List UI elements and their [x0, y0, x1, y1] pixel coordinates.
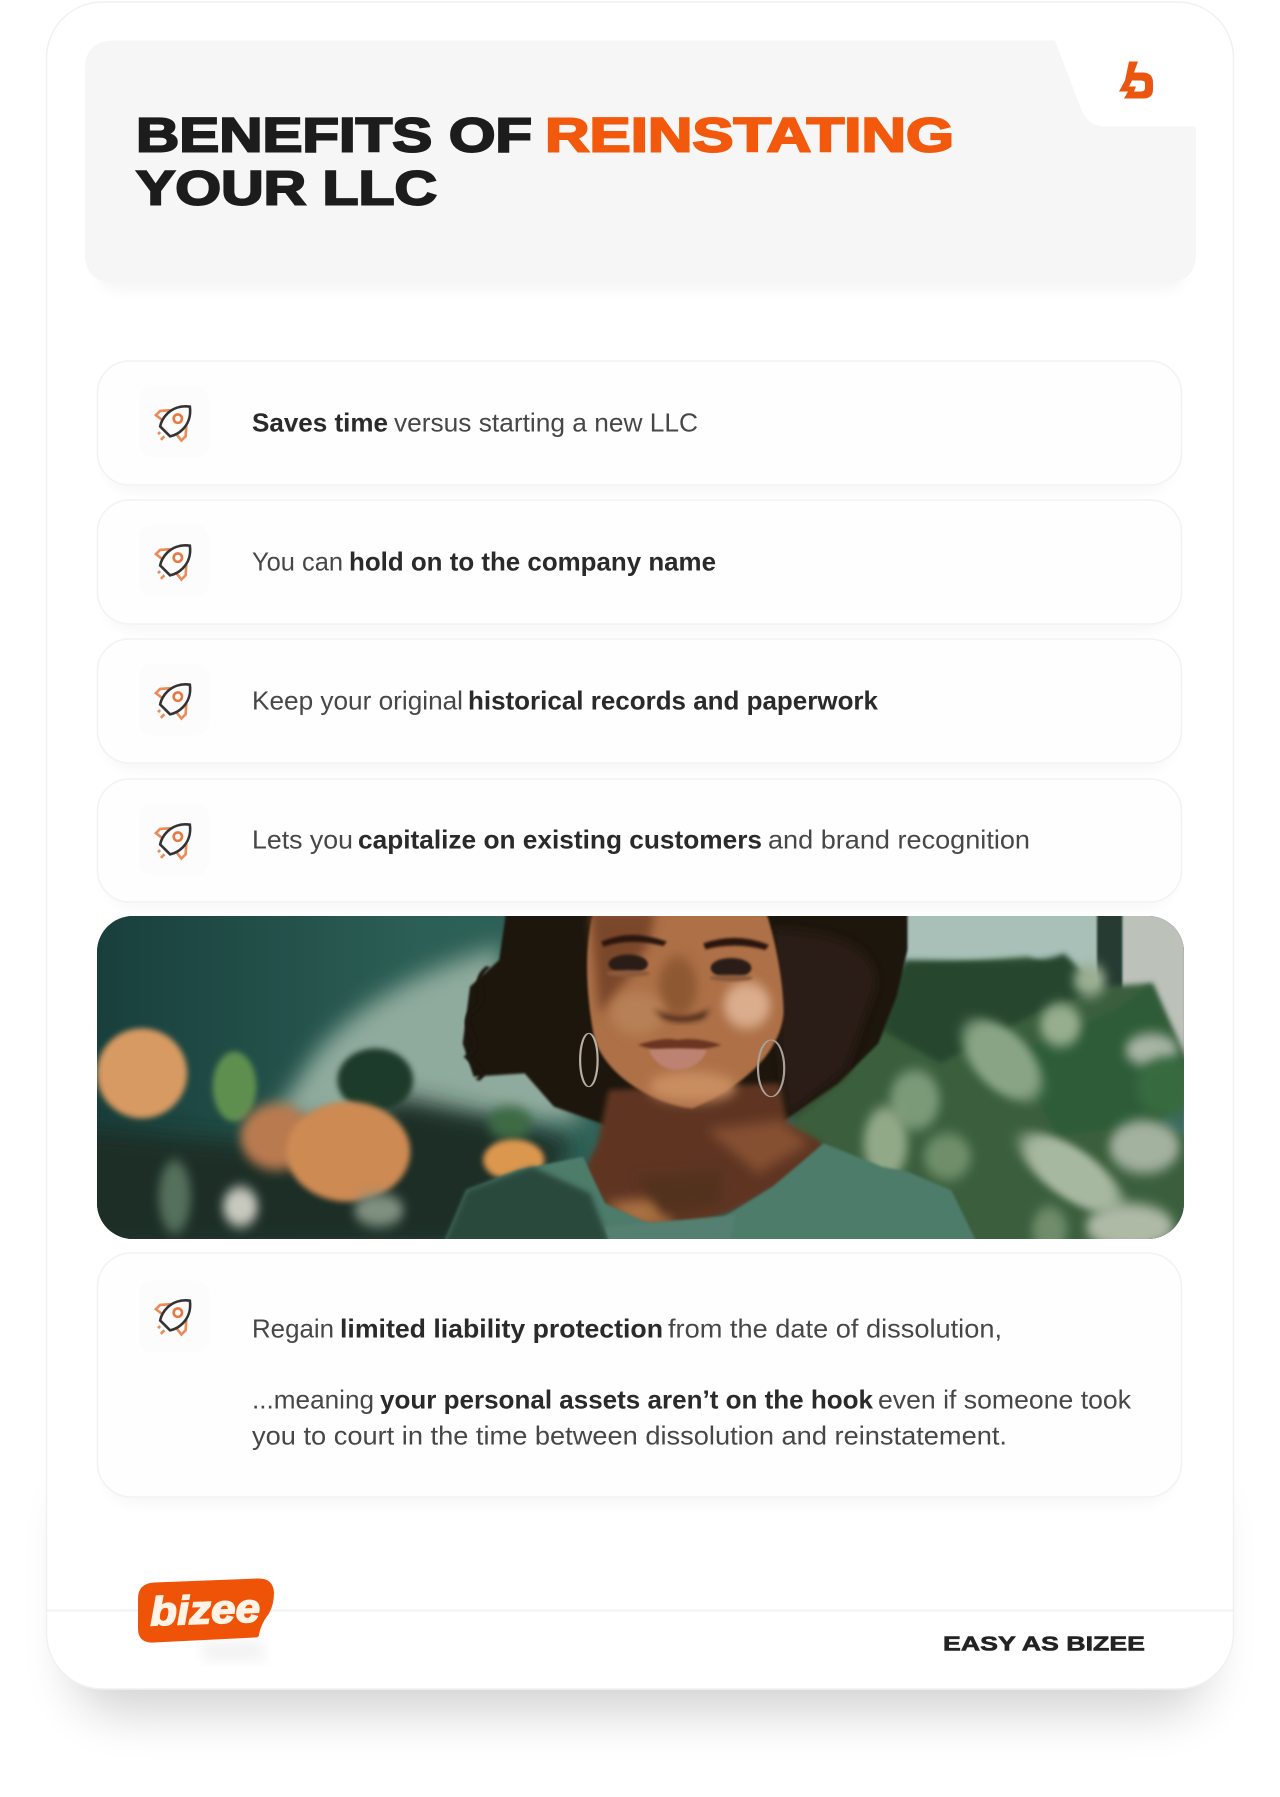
curls	[466, 966, 488, 1080]
lips	[638, 1039, 722, 1050]
header soft shadow	[99, 260, 1184, 290]
tagline: EASY AS BIZEE	[943, 1634, 1145, 1656]
eyes and brows	[601, 934, 667, 946]
card drop shadow	[71, 1478, 1209, 1714]
benefit 4 text: capitalize on existing customers	[358, 824, 762, 854]
left foreground dark foliage	[80, 1096, 576, 1250]
panel: benefit 2	[98, 500, 1182, 632]
wall highlight	[270, 946, 583, 1123]
benefit 5 text: Regain	[252, 1314, 334, 1344]
panel: benefit 3	[98, 639, 1182, 770]
benefit 5 text: your personal assets aren’t on the hook	[380, 1384, 874, 1414]
benefit 5 text: you to court in the time between dissolution and reinstatement.	[252, 1420, 1007, 1450]
shirt	[441, 1143, 980, 1250]
title: YOUR LLC	[136, 162, 437, 216]
logo: bizee	[138, 1578, 274, 1660]
panel: benefit 1	[98, 361, 1182, 492]
benefit 5 text: even if someone took	[878, 1384, 1132, 1414]
cheek and chin light	[724, 981, 770, 1028]
benefit 4 text	[252, 824, 1030, 854]
benefit 4 text: and brand recognition	[768, 824, 1030, 854]
plant leaves	[773, 956, 1210, 1250]
benefit 5 text: limited liability protection	[340, 1314, 663, 1344]
benefit 5 text	[252, 1314, 1132, 1450]
benefit 1 text: Saves time	[252, 408, 388, 438]
benefit 5 text: ...meaning	[252, 1384, 374, 1414]
icon: rocket	[139, 1280, 209, 1352]
benefit 5 text: from the date of dissolution,	[668, 1314, 1002, 1344]
right edge fade	[1192, 910, 1210, 1250]
icon: rocket	[139, 386, 209, 458]
icon: bizee mark	[1119, 62, 1153, 98]
panel: benefit 4	[98, 779, 1182, 908]
flowers	[97, 1028, 187, 1118]
earrings	[580, 1033, 598, 1086]
panel: benefit 5	[98, 1253, 1182, 1504]
title	[136, 110, 954, 216]
right background	[897, 910, 1108, 990]
title: REINSTATING	[545, 110, 954, 162]
benefit 3 text	[252, 686, 879, 716]
nose	[652, 1008, 711, 1021]
icon: rocket	[139, 664, 209, 736]
benefit 3 text: Keep your original	[252, 686, 463, 716]
benefit 2 text: hold on to the company name	[349, 546, 716, 576]
benefit 2 text: You can	[252, 546, 343, 576]
benefit 1 text: versus starting a new LLC	[394, 408, 698, 438]
panel: header	[85, 40, 1196, 282]
icon: rocket	[139, 524, 209, 596]
footer divider	[47, 1610, 1233, 1612]
neck	[583, 1083, 824, 1230]
benefit 3 text: historical records and paperwork	[468, 686, 879, 716]
icon: rocket	[139, 804, 209, 876]
benefit 1 text	[252, 408, 698, 438]
photo: smiling woman among plants	[97, 916, 1184, 1238]
hair	[463, 910, 907, 1130]
benefit 4 text: Lets you	[252, 824, 353, 854]
logo: bizee: bizee	[149, 1587, 261, 1634]
title: BENEFITS OF	[136, 110, 532, 162]
face	[587, 910, 784, 1108]
